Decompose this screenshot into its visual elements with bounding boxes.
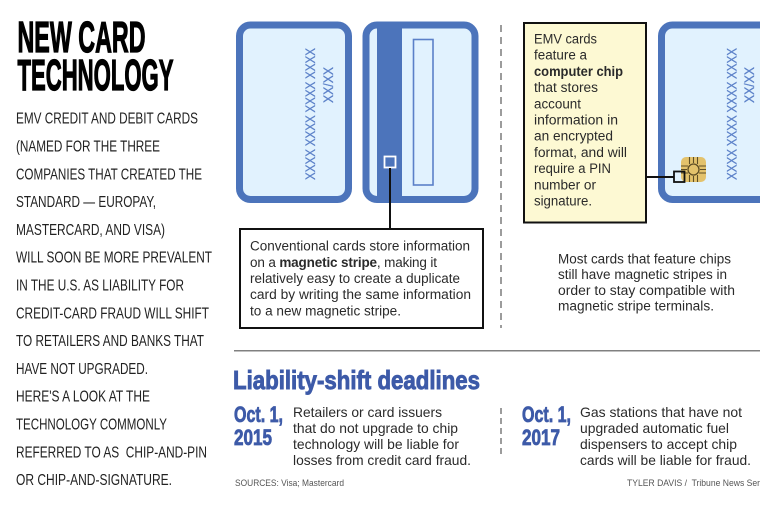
date: Oct. 1, 2017	[522, 402, 571, 450]
card back: magnetic stripe	[366, 24, 475, 200]
intro text block: MASTERCARD, AND VISA)	[16, 222, 165, 239]
intro text block: OR CHIP-AND-SIGNATURE.	[16, 472, 172, 489]
callout: computer chip: signature.	[534, 194, 592, 208]
section divider	[234, 350, 760, 352]
intro text block: HERE'S A LOOK AT THE	[16, 388, 150, 406]
deadline 2017	[522, 402, 751, 468]
note: magnetic stripes on chip cards: Most cards that feature chips	[558, 252, 731, 266]
text: 2017 deadline: dispensers to accept chip	[580, 436, 737, 452]
title: TECHNOLOGY	[18, 51, 174, 100]
title	[18, 13, 174, 100]
intro text block: CREDIT-CARD FRAUD WILL SHIFT	[16, 306, 209, 322]
callout: computer chip: information in	[534, 112, 618, 128]
note: magnetic stripes on chip cards: order to stay compatible with	[558, 283, 735, 298]
dashed divider: deadlines	[500, 408, 502, 458]
card front: conventional: XX/XX	[321, 67, 336, 103]
callout: magnetic stripe: relatively easy to create a duplicate	[250, 271, 460, 286]
note: magnetic stripes on chip cards	[558, 252, 735, 314]
intro text block	[16, 110, 212, 489]
callout: computer chip: format, and will	[534, 145, 627, 160]
card front: conventional: XXXX	[303, 82, 318, 113]
card front: conventional	[240, 25, 348, 200]
callout: magnetic stripe: on a magnetic stripe, making it	[250, 255, 437, 270]
callout: computer chip: an encrypted	[534, 129, 613, 144]
callout: computer chip: EMV cards	[534, 32, 597, 46]
text: 2015 deadline: losses from credit card fraud.	[293, 452, 471, 468]
card front: conventional: XXXX	[303, 115, 318, 146]
text: 2017 deadline: upgraded automatic fuel	[580, 420, 729, 436]
card front: EMV chip: XX/XX	[742, 67, 757, 103]
intro text block: TO RETAILERS AND BANKS THAT	[16, 333, 204, 350]
intro text block: EMV CREDIT AND DEBIT CARDS	[16, 110, 198, 128]
callout: magnetic stripe	[240, 229, 483, 328]
card front: EMV chip: XXXX	[724, 115, 739, 146]
callout: computer chip	[524, 23, 646, 222]
text: 2015 deadline	[293, 404, 471, 468]
dashed divider	[500, 25, 502, 328]
intro text block: STANDARD — EUROPAY,	[16, 194, 156, 211]
callout: computer chip: number or	[534, 177, 597, 192]
intro text block: TECHNOLOGY COMMONLY	[16, 416, 167, 434]
callout marker: magnetic stripe	[384, 156, 396, 229]
text: 2017 deadline	[580, 404, 751, 468]
card front: EMV chip: XXXX	[724, 82, 739, 113]
intro text block: REFERRED TO AS CHIP-AND-PIN	[16, 444, 207, 462]
title: NEW CARD	[18, 13, 146, 62]
callout: computer chip: that stores	[534, 80, 598, 95]
heading: liability-shift deadlines: Liability-shift deadlines	[233, 365, 480, 395]
note: magnetic stripes on chip cards: magnetic stripe terminals.	[558, 298, 714, 314]
date: Oct. 1, 2015: 2015	[234, 425, 272, 450]
card front: EMV chip: XXXX	[724, 48, 739, 79]
intro text block: COMPANIES THAT CREATED THE	[16, 166, 202, 184]
card front: conventional: XXXX	[303, 48, 318, 79]
intro text block: HAVE NOT UPGRADED.	[16, 361, 148, 378]
note: magnetic stripes on chip cards: still have magnetic stripes in	[558, 267, 727, 282]
card front: conventional: XXXX	[303, 149, 318, 180]
text: 2015 deadline: that do not upgrade to chip	[293, 420, 458, 436]
card front: EMV chip	[662, 25, 760, 200]
deadline 2015	[234, 402, 471, 468]
callout: magnetic stripe: to a new magnetic stripe.	[250, 303, 401, 318]
date: Oct. 1, 2017: Oct. 1,	[522, 402, 571, 427]
text: 2015 deadline: Retailers or card issuers	[293, 404, 442, 420]
callout: computer chip: computer chip	[534, 64, 623, 79]
date: Oct. 1, 2015	[234, 402, 283, 450]
callout: computer chip: account	[534, 96, 581, 111]
text: 2017 deadline: cards will be liable for fraud.	[580, 452, 751, 468]
callout: magnetic stripe: Conventional cards store information	[250, 238, 470, 254]
card front: EMV chip: XXXX	[724, 149, 739, 180]
sources: SOURCES: Visa; Mastercard	[235, 478, 344, 489]
intro text block: IN THE U.S. AS LIABILITY FOR	[16, 278, 184, 295]
callout: magnetic stripe: card by writing the same information	[250, 287, 471, 302]
callout marker: chip	[646, 172, 684, 182]
intro text block: WILL SOON BE MORE PREVALENT	[16, 250, 212, 267]
callout: computer chip: require a PIN	[534, 161, 611, 176]
text: 2015 deadline: technology will be liable for	[293, 436, 459, 452]
text: 2017 deadline: Gas stations that have not	[580, 404, 742, 420]
date: Oct. 1, 2015: Oct. 1,	[234, 402, 283, 427]
icon: computer chip	[681, 157, 706, 182]
date: Oct. 1, 2017: 2017	[522, 425, 560, 450]
callout: computer chip: feature a	[534, 48, 587, 63]
intro text block: (NAMED FOR THE THREE	[16, 138, 160, 156]
